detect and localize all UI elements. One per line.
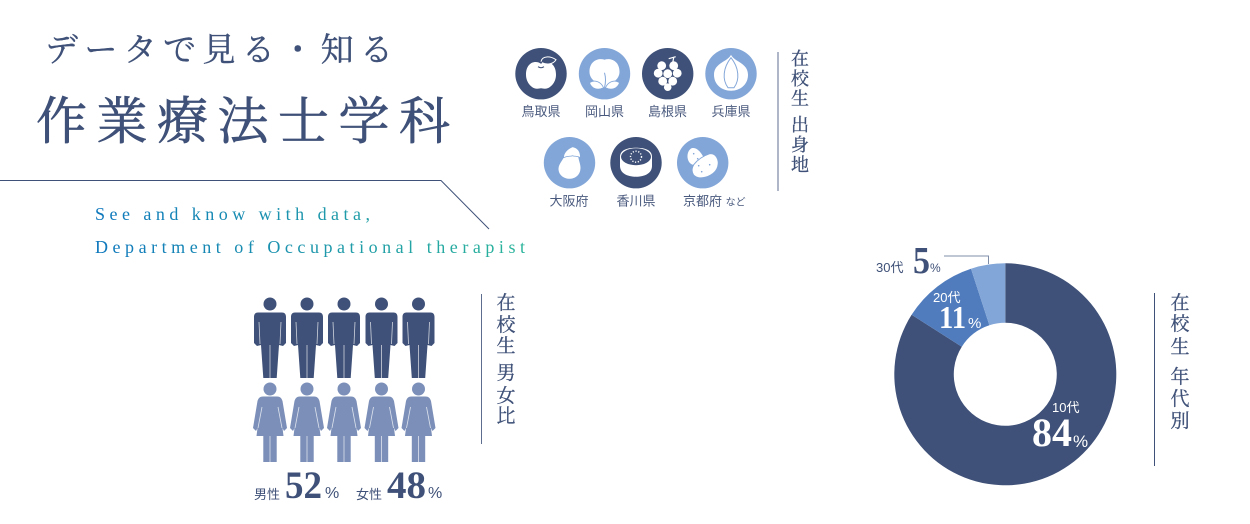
vertical heading: gender ratio: 在 [496, 292, 516, 314]
prefecture labels: 大阪府 [549, 194, 589, 208]
label: 20s: 11 [939, 299, 966, 335]
panel: gender ratio [253, 292, 516, 507]
male percentage: % [325, 485, 339, 502]
label: 20s: 20代 [933, 290, 960, 305]
divider [480, 294, 482, 444]
female percentage: 女性 [356, 487, 382, 502]
label: 20s [933, 290, 981, 335]
prefecture labels: 岡山県 [585, 104, 624, 119]
label: 30s: 5 [913, 240, 930, 282]
vertical heading: age: 在 [1170, 292, 1190, 314]
label: 30s: 30代 [876, 260, 903, 275]
vertical heading: hometown [791, 49, 810, 175]
divider [777, 52, 779, 191]
male percentage [254, 464, 339, 507]
label: 20s: % [968, 315, 981, 332]
icon: kiwi, Kagawa [610, 137, 662, 188]
vertical heading: hometown: 地 [791, 155, 809, 175]
title rule with diagonal [0, 180, 489, 229]
vertical heading: gender ratio: 男 [496, 362, 516, 384]
icon: potatoes, Kyoto [677, 137, 728, 188]
label: 10s: % [1073, 432, 1088, 451]
icon: apple, Tottori [515, 48, 567, 99]
women pictogram [253, 382, 436, 462]
female percentage: % [428, 485, 442, 502]
english tagline [95, 204, 525, 257]
vertical heading: hometown: 出 [791, 115, 809, 135]
vertical heading: age: 校 [1170, 313, 1190, 335]
vertical heading: hometown: 校 [791, 69, 810, 89]
panel: age distribution [876, 240, 1190, 485]
label: 30s [876, 240, 941, 282]
panel: hometown [515, 48, 810, 208]
english tagline: See and know with data, [95, 204, 370, 224]
icon: grapes, Shimane [642, 48, 693, 99]
vertical heading: gender ratio: 女 [496, 385, 516, 407]
divider [1154, 293, 1156, 466]
vertical heading: hometown: 生 [791, 89, 809, 109]
vertical heading: gender ratio: 生 [496, 335, 516, 357]
label: 10s: 84 [1032, 410, 1072, 455]
men pictogram [254, 298, 434, 378]
icon: eggplant, Osaka [544, 137, 595, 188]
icon: peach, Okayama [579, 48, 630, 99]
vertical heading: age: 生 [1170, 336, 1190, 358]
female percentage [356, 464, 442, 507]
vertical heading: hometown: 在 [791, 49, 809, 69]
label: 10s: 10代 [1052, 400, 1079, 415]
leader line [944, 256, 988, 264]
donut chart [894, 263, 1116, 485]
label: 30s: % [930, 261, 941, 275]
vertical heading: age: 代 [1170, 388, 1190, 410]
icon: onion, Hyogo [705, 48, 757, 99]
prefecture labels: 香川県 [616, 194, 656, 208]
vertical heading: gender ratio: 校 [496, 314, 516, 336]
prefecture labels: 兵庫県 [711, 104, 751, 119]
prefecture labels: 島根県 [648, 104, 687, 119]
vertical heading: age [1170, 292, 1190, 432]
vertical heading: gender ratio [496, 292, 516, 427]
subtitle heading: データで見る・知る [45, 33, 393, 69]
prefecture labels: 京都府 など [683, 194, 746, 208]
english tagline: Department of Occupational therapist [95, 237, 525, 257]
main title: 作業療法士学科 [36, 95, 450, 151]
female percentage: 48 [387, 464, 426, 507]
prefecture labels: 鳥取県 [521, 104, 561, 119]
label: 10s [1032, 400, 1088, 455]
vertical heading: age: 年 [1170, 366, 1190, 388]
vertical heading: hometown: 身 [791, 135, 809, 155]
prefecture labels [521, 104, 751, 208]
vertical heading: gender ratio: 比 [496, 405, 516, 427]
male percentage: 男性 [254, 487, 280, 502]
male percentage: 52 [285, 464, 322, 507]
vertical heading: age: 別 [1170, 410, 1190, 432]
